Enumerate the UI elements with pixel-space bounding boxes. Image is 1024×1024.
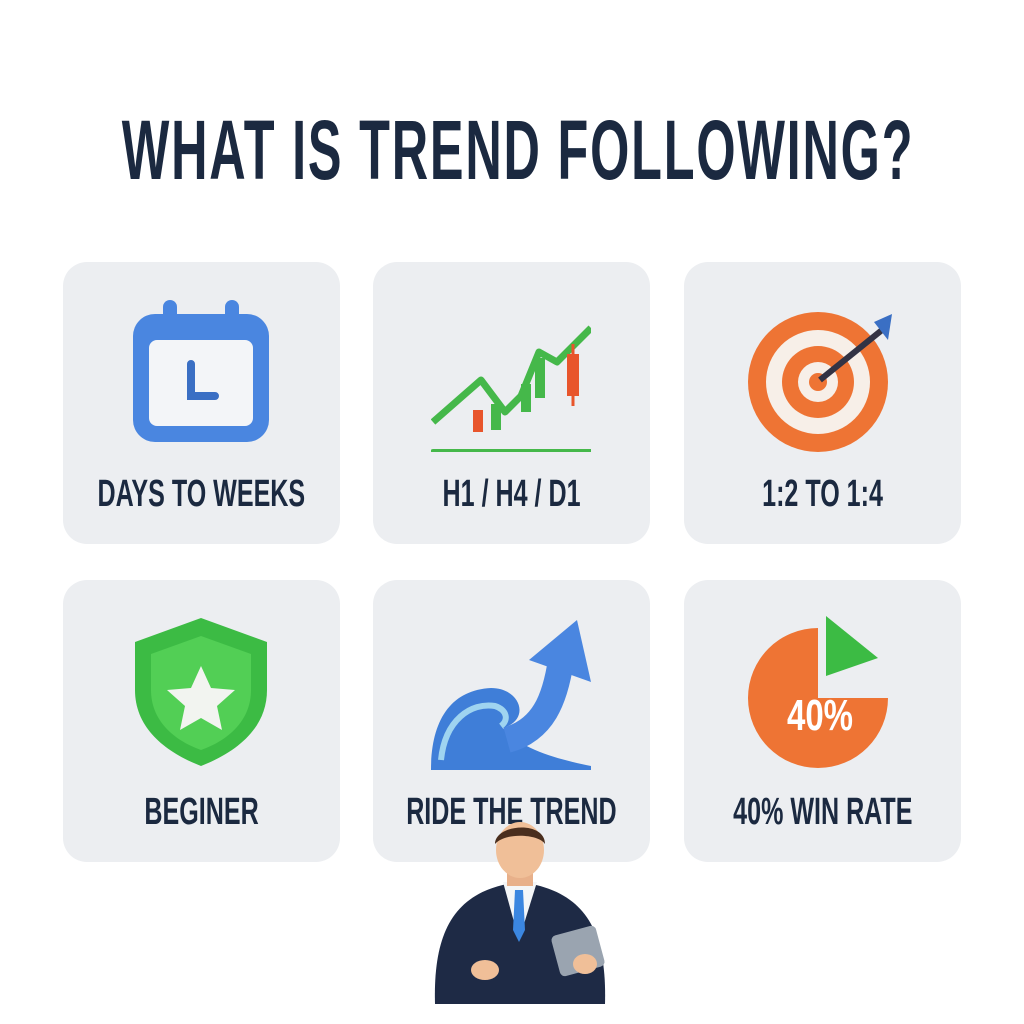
icon: wave arrow	[431, 620, 591, 770]
label: BEGINER	[144, 791, 259, 833]
panel: timeframes	[373, 262, 650, 544]
icon: pie chart: 40%	[787, 692, 853, 740]
panel: days to weeks	[63, 262, 340, 544]
panel: ride the trend	[373, 580, 650, 862]
panel: win rate	[684, 580, 961, 862]
icon: target	[748, 312, 892, 452]
icon: pie chart	[748, 616, 888, 768]
title: WHAT IS TREND FOLLOWING?	[122, 103, 914, 197]
label: DAYS TO WEEKS	[98, 473, 305, 515]
label: RIDE THE TREND	[406, 791, 617, 833]
icon: calendar clock	[133, 300, 269, 442]
label: H1 / H4 / D1	[442, 473, 580, 515]
icon: shield star	[135, 618, 267, 766]
icon: candlestick chart	[431, 326, 591, 452]
panel: risk reward	[684, 262, 961, 544]
label: 40% WIN RATE	[733, 791, 912, 833]
illustration: businessman with tablet	[434, 822, 606, 1004]
panel: beginner	[63, 580, 340, 862]
label: 1:2 TO 1:4	[762, 473, 883, 515]
